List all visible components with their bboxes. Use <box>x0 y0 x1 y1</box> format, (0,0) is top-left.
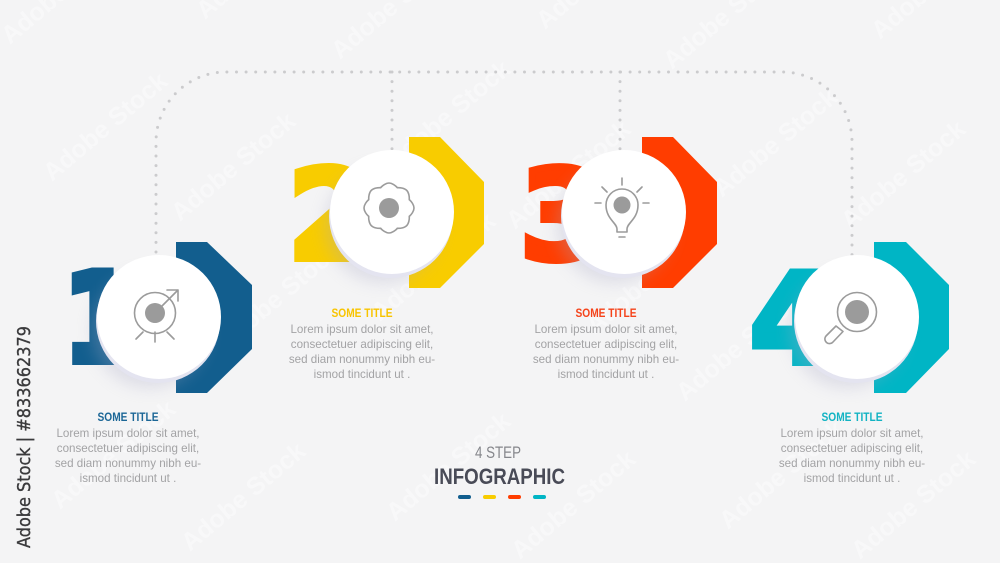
disc 1 <box>92 255 221 388</box>
heading <box>434 443 565 489</box>
disc 4 <box>790 255 919 388</box>
text 2: Lorem ipsum dolor sit amet, <box>290 323 434 336</box>
number 2: 2 <box>288 144 374 288</box>
number 4: 4 <box>750 248 836 392</box>
text 2: consectetuer adipiscing elit, <box>291 338 433 351</box>
text: Adobe Stock <box>836 115 971 235</box>
step 3 <box>520 137 717 381</box>
disc 3 <box>557 150 686 283</box>
text 4: ismod tincidunt ut . <box>804 472 900 485</box>
text 3: consectetuer adipiscing elit, <box>535 338 677 351</box>
title 3: SOME TITLE <box>576 306 636 320</box>
number 1: 1 <box>63 248 135 392</box>
tab shape 3 <box>642 137 717 288</box>
number 3: 3 <box>520 144 606 288</box>
tab shape 1 <box>176 242 252 393</box>
text 1: sed diam nonummy nibh eu- <box>55 457 201 470</box>
text: Adobe Stock <box>46 395 181 515</box>
text 4 <box>779 427 925 485</box>
icon: light bulb <box>595 178 649 237</box>
text 1: Lorem ipsum dolor sit amet, <box>56 427 200 440</box>
text 1 <box>55 427 201 485</box>
dotted connector lines <box>156 72 852 255</box>
text 3: ismod tincidunt ut . <box>558 368 654 381</box>
icon: badge <box>364 183 414 233</box>
step 2 <box>288 137 484 381</box>
title 1: SOME TITLE <box>98 410 158 424</box>
text 1: consectetuer adipiscing elit, <box>57 442 199 455</box>
text 1: ismod tincidunt ut . <box>80 472 176 485</box>
text 4: consectetuer adipiscing elit, <box>781 442 923 455</box>
step 1 <box>55 242 252 485</box>
step 4 <box>750 242 949 485</box>
icon: target with arrow <box>134 290 178 342</box>
text: Adobe Stock <box>671 287 806 407</box>
icon: magnifier <box>825 292 876 344</box>
text 3 <box>533 323 679 381</box>
disc 2 <box>325 150 454 283</box>
tab shape 4 <box>874 242 949 393</box>
colour key dashes <box>458 495 546 499</box>
text 2: sed diam nonummy nibh eu- <box>289 353 435 366</box>
text: Adobe Stock <box>581 220 716 340</box>
text: Adobe Stock <box>506 445 641 563</box>
text 2 <box>289 323 435 381</box>
text 4: Lorem ipsum dolor sit amet, <box>780 427 924 440</box>
text: Adobe Stock <box>211 237 346 357</box>
text: Adobe Stock <box>714 415 849 535</box>
text: Adobe Stock <box>176 437 311 557</box>
text 4: sed diam nonummy nibh eu- <box>779 457 925 470</box>
text 3: sed diam nonummy nibh eu- <box>533 353 679 366</box>
text: Adobe Stock <box>381 407 516 527</box>
text: Adobe Stock <box>846 445 981 563</box>
text: Adobe Stock <box>708 83 843 203</box>
text: Adobe Stock <box>366 207 501 327</box>
text: Adobe Stock <box>381 55 516 175</box>
stock id credit: Adobe Stock | #833662379 <box>14 326 35 548</box>
text 2: ismod tincidunt ut . <box>314 368 410 381</box>
title 4: SOME TITLE <box>822 410 882 424</box>
text 3: Lorem ipsum dolor sit amet, <box>534 323 678 336</box>
text: Adobe Stock <box>166 107 301 227</box>
text: Adobe Stock <box>501 115 636 235</box>
title 2: SOME TITLE <box>332 306 392 320</box>
tab shape 2 <box>409 137 484 288</box>
heading: 4 STEP <box>475 443 521 462</box>
text: Adobe Stock <box>38 67 173 187</box>
heading: INFOGRAPHIC <box>434 464 565 489</box>
